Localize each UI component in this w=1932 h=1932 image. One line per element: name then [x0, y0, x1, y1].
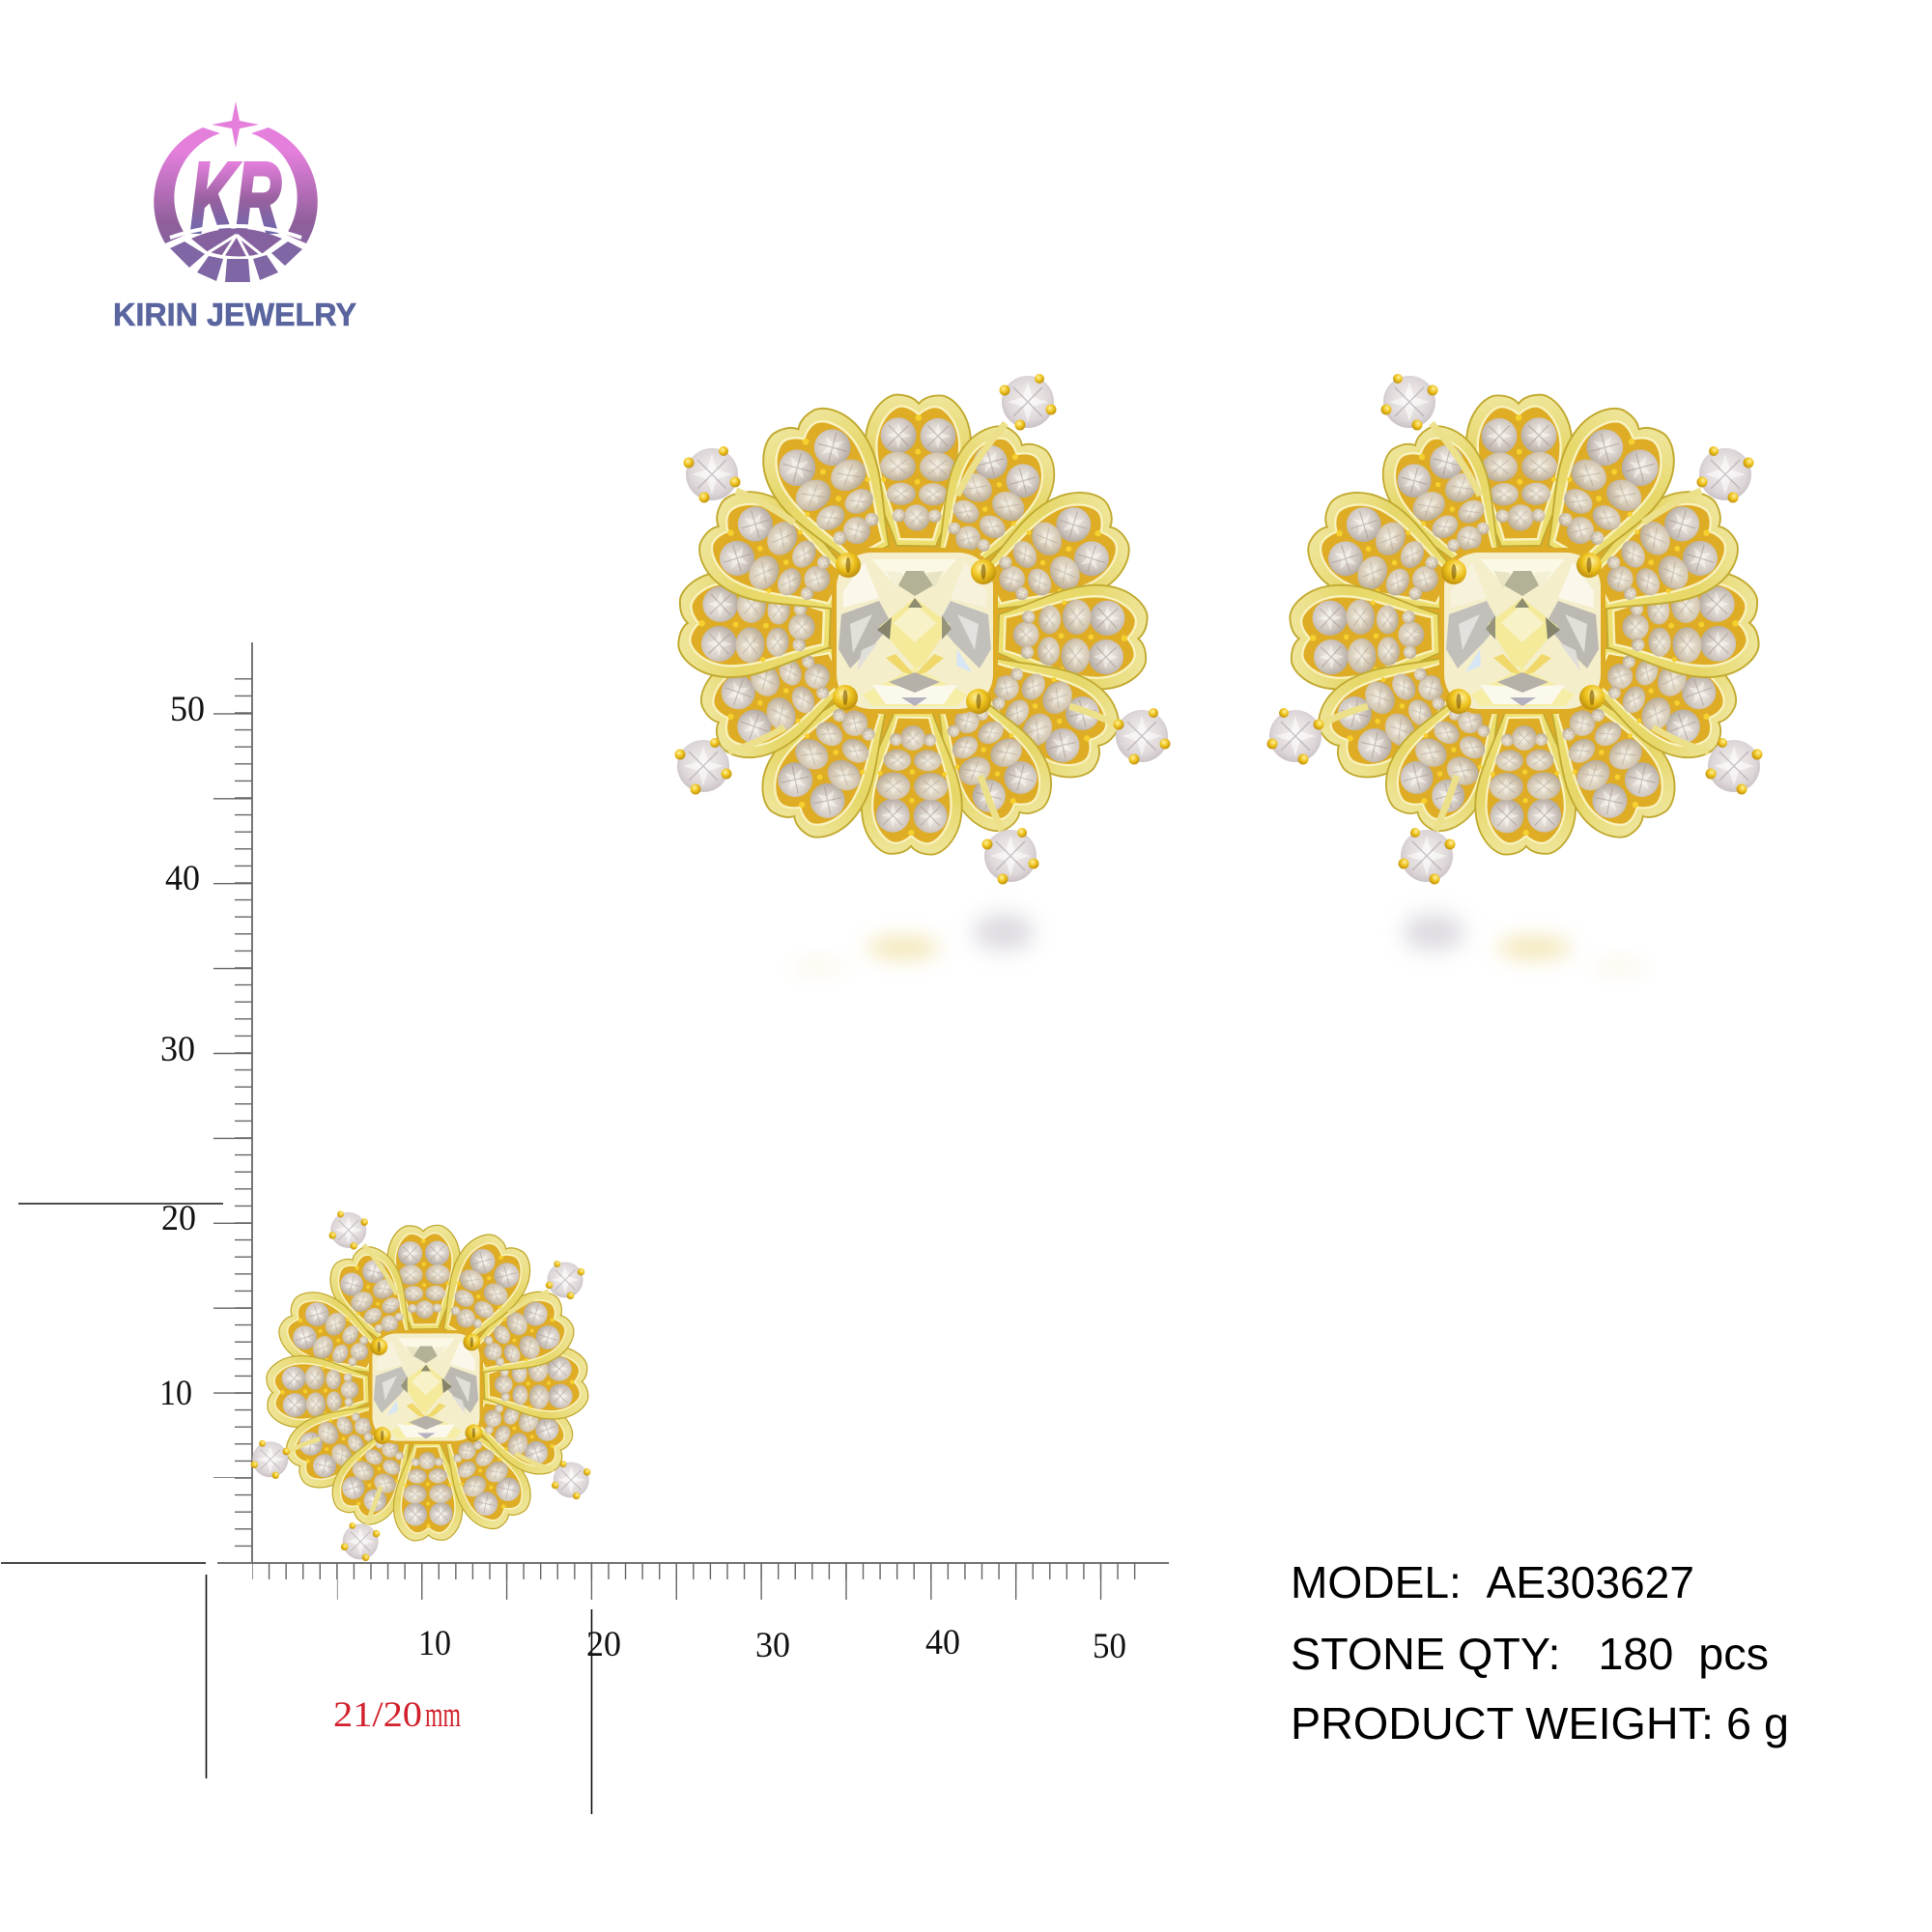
ruler labels: horizontal: 40	[925, 1623, 960, 1662]
product specs	[1291, 1557, 1789, 1748]
product specs: PRODUCT WEIGHT: 6 g	[1291, 1698, 1789, 1748]
ruler labels: horizontal: 10	[418, 1624, 451, 1663]
ruler: vertical axis with ticks	[233, 642, 252, 1563]
logo icon: star	[212, 101, 259, 148]
ruler labels: vertical: 50	[170, 690, 205, 729]
ruler labels: horizontal	[418, 1623, 1126, 1666]
dimension label: 21/20	[333, 1695, 422, 1735]
ruler labels: horizontal: 50	[1093, 1627, 1126, 1666]
ruler labels: horizontal: 30	[755, 1626, 790, 1665]
earring: right reflection	[1403, 913, 1646, 973]
ruler labels: vertical	[159, 690, 205, 1413]
logo icon: ring left arc	[154, 128, 220, 243]
crop guide lines	[1, 1204, 591, 1814]
logo monogram KR: KR	[190, 142, 281, 253]
earring: left large flower	[674, 374, 1171, 885]
earring: right large flower	[1267, 374, 1762, 885]
logo icon: globe grid	[170, 226, 302, 282]
ruler labels: vertical: 20	[161, 1199, 196, 1238]
dimension label	[333, 1695, 461, 1735]
logo wordmark: KIRIN JEWELRY	[113, 297, 356, 332]
dimension label: mm	[425, 1695, 461, 1735]
ruler labels: horizontal: 20	[586, 1625, 621, 1664]
logo icon: ring right arc	[251, 128, 318, 243]
ruler labels: vertical: 30	[160, 1030, 195, 1069]
earring: small flower at scale	[251, 1211, 590, 1561]
ruler labels: vertical: 40	[165, 859, 200, 898]
earring: left reflection	[791, 913, 1035, 973]
product specs: MODEL: AE303627	[1291, 1557, 1694, 1607]
ruler labels: vertical: 10	[159, 1374, 192, 1413]
ruler: horizontal axis with ticks	[217, 1563, 1169, 1581]
logo: Kirin Jewelry	[113, 101, 356, 332]
product specs: STONE QTY: 180 pcs	[1291, 1629, 1769, 1679]
